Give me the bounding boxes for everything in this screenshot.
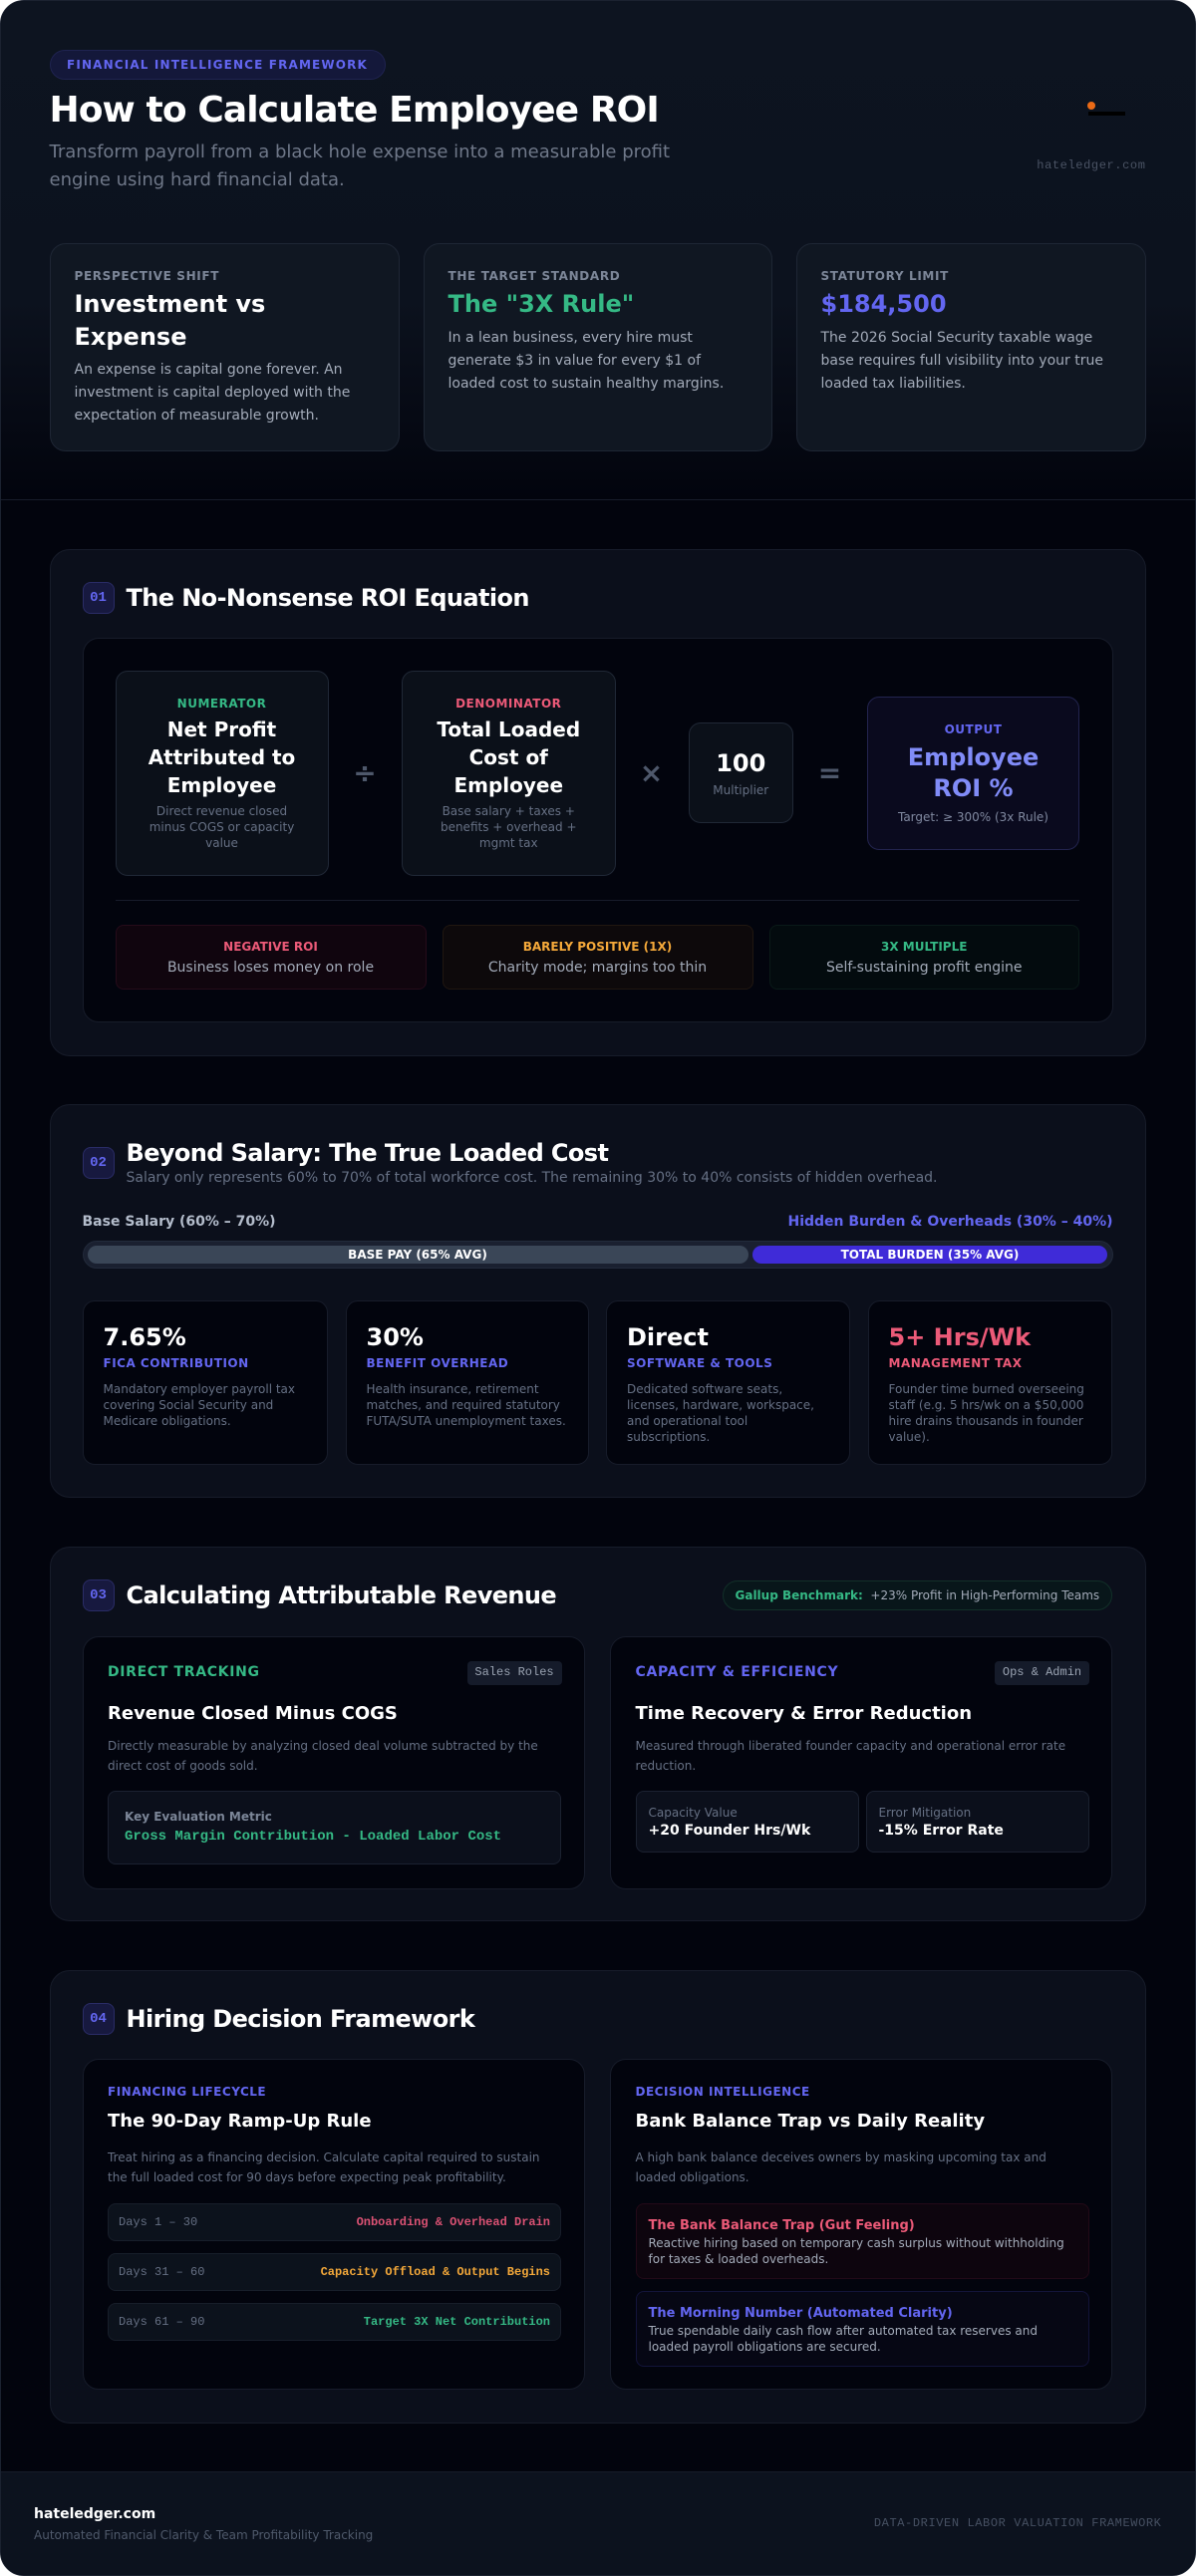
equation: numerator (116, 670, 329, 875)
timeline row 2: Capacity Offload & Output Begins (321, 2264, 550, 2278)
card description: Treat hiring as a financing decision. Calculate capital required to sustain the full loaded cost for 90 days before expecting peak profitability. (108, 2150, 540, 2184)
equation: numerator: Net Profit Attributed to Employee (149, 717, 295, 797)
cost card: benefit overhead (345, 1300, 588, 1465)
stat card: statutory limit: STATUTORY LIMIT (821, 269, 949, 283)
stat card: target standard: THE TARGET STANDARD (448, 269, 620, 283)
role tag: Sales Roles (474, 1664, 554, 1678)
stat card: perspective shift (50, 243, 399, 450)
timeline row 3: Days 61 – 90 (119, 2314, 204, 2328)
card title: The 90-Day Ramp-Up Rule (108, 2111, 372, 2131)
section 2 number: 02 (90, 1154, 107, 1170)
capacity metric: Capacity Value (648, 1806, 738, 1820)
metric box (108, 1790, 561, 1863)
cost card: FICA: 7.65% (104, 1323, 186, 1351)
cost card: benefit overhead: Health insurance, retirement matches, and required statutory FUTA/SUTA unemployment taxes. (367, 1381, 566, 1427)
bar label: hidden burden: Hidden Burden & Overheads (30% – 40%) (787, 1214, 1112, 1230)
card label: CAPACITY & EFFICIENCY (636, 1664, 838, 1680)
cost card: software: SOFTWARE & TOOLS (627, 1356, 772, 1370)
domain text: hateledger.com (1037, 157, 1146, 171)
role tag (995, 1660, 1089, 1684)
operator: divide: ÷ (353, 755, 377, 789)
panel: section 2 background (50, 1104, 1146, 1497)
stat card: perspective shift: An expense is capital gone forever. An investment is capital deployed with the expectation of measurable growth. (74, 361, 350, 423)
benchmark pill: Gallup Benchmark: +23% Profit in High-Performing Teams (736, 1588, 1099, 1602)
cost card: benefit overhead: 30% (367, 1323, 424, 1351)
equation: output: Target: ≥ 300% (3x Rule) (898, 809, 1048, 823)
footer note: DATA-DRIVEN LABOR VALUATION FRAMEWORK (874, 2515, 1162, 2529)
equation: output (867, 696, 1079, 849)
section 3 number (82, 1578, 114, 1610)
result: barely positive: BARELY POSITIVE (1X) (523, 939, 672, 953)
result: negative ROI (116, 925, 427, 989)
section 1 heading: The No-Nonsense ROI Equation (126, 584, 529, 612)
subtitle: Transform payroll from a black hole expense into a measurable profit engine using hard financial data. (50, 142, 670, 190)
card: direct tracking (82, 1636, 584, 1889)
timeline row 1 (108, 2202, 561, 2240)
equation: multiplier: 100 (716, 749, 765, 777)
cost card: FICA: FICA CONTRIBUTION (104, 1356, 249, 1370)
equation: output: Employee ROI % (908, 743, 1039, 802)
card description: A high bank balance deceives owners by masking upcoming tax and loaded obligations. (636, 2150, 1046, 2184)
total burden segment: TOTAL BURDEN (35% AVG) (841, 1248, 1019, 1262)
card: ramp-up rule (82, 2059, 584, 2390)
card label: FINANCING LIFECYCLE (108, 2085, 266, 2099)
equation: denominator: Base salary + taxes + benefits + overhead + mgmt tax (441, 803, 577, 849)
card label: DIRECT TRACKING (108, 1664, 260, 1680)
cost card: software: Dedicated software seats, licenses, hardware, workspace, and operational tool subscriptions. (627, 1381, 814, 1443)
timeline row 3: Target 3X Net Contribution (364, 2314, 550, 2328)
callout: morning number: True spendable daily cash flow after automated tax reserves and loaded payroll obligations are secured. (648, 2324, 1038, 2354)
footer (0, 2471, 1196, 2575)
card label: DECISION INTELLIGENCE (636, 2085, 810, 2099)
panel: section 4 background (50, 1969, 1146, 2424)
callout: bank balance trap (636, 2202, 1088, 2278)
result: 3x multiple: Self-sustaining profit engine (826, 959, 1022, 975)
section 4 heading: Hiring Decision Framework (126, 2005, 474, 2033)
cost card: management tax: MANAGEMENT TAX (889, 1356, 1022, 1370)
panel: section 3 background (50, 1547, 1146, 1921)
section 1 number: 01 (90, 590, 107, 606)
timeline row 2: Days 31 – 60 (119, 2264, 204, 2278)
title: How to Calculate Employee ROI (50, 90, 659, 130)
base pay segment (88, 1246, 748, 1264)
stat card: perspective shift: Investment vs Expense (74, 289, 265, 351)
stat card: statutory limit (795, 243, 1146, 450)
footer brand: hateledger.com (34, 2505, 155, 2521)
header band (0, 0, 1196, 500)
timeline row 1: Onboarding & Overhead Drain (357, 2214, 550, 2228)
section 3 number: 03 (90, 1586, 107, 1602)
logo mark (1087, 102, 1125, 116)
section 2 subtitle: Salary only represents 60% to 70% of total workforce cost. The remaining 30% to 40% consists of hidden overhead. (126, 1170, 937, 1186)
total burden segment (752, 1246, 1107, 1264)
stat card: statutory limit: $184,500 (821, 289, 947, 317)
stat card: perspective shift: PERSPECTIVE SHIFT (74, 269, 219, 283)
stat card: target standard: In a lean business, every hire must generate $3 in value for every $1 of loaded cost to sustain healthy margins. (448, 330, 724, 392)
panel: equation (82, 638, 1112, 1022)
timeline row 1: Days 1 – 30 (119, 2214, 197, 2228)
capacity metric (636, 1790, 859, 1852)
result: barely positive: Charity mode; margins too thin (488, 959, 707, 975)
eyebrow badge: FINANCIAL INTELLIGENCE FRAMEWORK (67, 58, 368, 72)
bar label: base salary: Base Salary (60% – 70%) (82, 1214, 276, 1230)
cost card: benefit overhead: BENEFIT OVERHEAD (367, 1356, 508, 1370)
card description: Directly measurable by analyzing closed deal volume subtracted by the direct cost of goods sold. (108, 1738, 538, 1772)
timeline row 3 (108, 2302, 561, 2340)
capacity metric: +20 Founder Hrs/Wk (648, 1822, 810, 1838)
equation: numerator: Direct revenue closed minus COGS or capacity value (150, 803, 294, 849)
footer tagline: Automated Financial Clarity & Team Profitability Tracking (34, 2527, 373, 2541)
section 3 heading: Calculating Attributable Revenue (126, 1580, 556, 1608)
card title: Bank Balance Trap vs Daily Reality (636, 2111, 985, 2131)
card: capacity and efficiency (610, 1636, 1112, 1889)
error metric: -15% Error Rate (879, 1822, 1004, 1838)
metric box: Key Evaluation Metric (125, 1810, 272, 1824)
error metric (865, 1790, 1088, 1852)
callout: bank balance trap: The Bank Balance Trap (Gut Feeling) (648, 2218, 915, 2232)
card: bank balance trap vs daily reality (610, 2059, 1112, 2390)
result: 3x multiple (769, 925, 1079, 989)
result: negative ROI: Business loses money on role (167, 959, 374, 975)
equation: denominator: Total Loaded Cost of Employee (437, 717, 580, 797)
stat card: statutory limit: The 2026 Social Security taxable wage base requires full visibility into your true loaded tax liabilities. (821, 330, 1103, 392)
stacked cost bar (82, 1240, 1112, 1268)
card title: Revenue Closed Minus COGS (108, 1702, 398, 1724)
card title: Time Recovery & Error Reduction (636, 1702, 972, 1724)
equation: denominator (402, 670, 616, 875)
cost card: FICA (82, 1300, 327, 1465)
benchmark pill (722, 1580, 1112, 1610)
section 4 number (82, 2003, 114, 2035)
callout: morning number: The Morning Number (Automated Clarity) (648, 2306, 953, 2320)
section 2 heading: Beyond Salary: The True Loaded Cost (126, 1138, 608, 1166)
section 1 number (82, 582, 114, 614)
base pay segment: BASE PAY (65% AVG) (348, 1248, 487, 1262)
section 4 number: 04 (90, 2011, 107, 2027)
eyebrow badge (50, 50, 385, 80)
stat card: target standard: The "3X Rule" (448, 289, 634, 317)
cost card: FICA: Mandatory employer payroll tax covering Social Security and Medicare obligations. (104, 1381, 295, 1427)
operator: multiply: × (640, 755, 663, 789)
result: barely positive (443, 925, 753, 989)
card description: Measured through liberated founder capacity and operational error rate reduction. (636, 1738, 1065, 1772)
role tag: Ops & Admin (1003, 1664, 1081, 1678)
divider (116, 899, 1078, 901)
panel: section 1 background (50, 548, 1146, 1056)
role tag (466, 1660, 562, 1684)
cost card: management tax: Founder time burned overseeing staff (e.g. 5 hrs/wk on a $50,000 hire drains thousands in founder value). (889, 1381, 1084, 1443)
equation: output: OUTPUT (945, 721, 1002, 735)
result: negative ROI: NEGATIVE ROI (223, 939, 318, 953)
equation: multiplier: Multiplier (713, 783, 768, 797)
error metric: Error Mitigation (879, 1806, 971, 1820)
equation: numerator: NUMERATOR (177, 696, 266, 710)
callout: bank balance trap: Reactive hiring based on temporary cash surplus without withholding for taxes & loaded overheads. (648, 2236, 1064, 2266)
callout: morning number (636, 2290, 1088, 2366)
cost card: management tax (867, 1300, 1112, 1465)
equation: denominator: DENOMINATOR (455, 696, 561, 710)
cost card: management tax: 5+ Hrs/Wk (889, 1323, 1031, 1351)
metric box: Gross Margin Contribution - Loaded Labor Cost (125, 1828, 501, 1844)
equation: multiplier (688, 721, 793, 823)
cost card: software (606, 1300, 850, 1465)
cost card: software: Direct (627, 1323, 709, 1351)
stat card: target standard (423, 243, 771, 450)
operator: equals: = (818, 755, 841, 789)
section 2 number (82, 1146, 114, 1178)
timeline row 2 (108, 2252, 561, 2290)
result: 3x multiple: 3X MULTIPLE (881, 939, 967, 953)
